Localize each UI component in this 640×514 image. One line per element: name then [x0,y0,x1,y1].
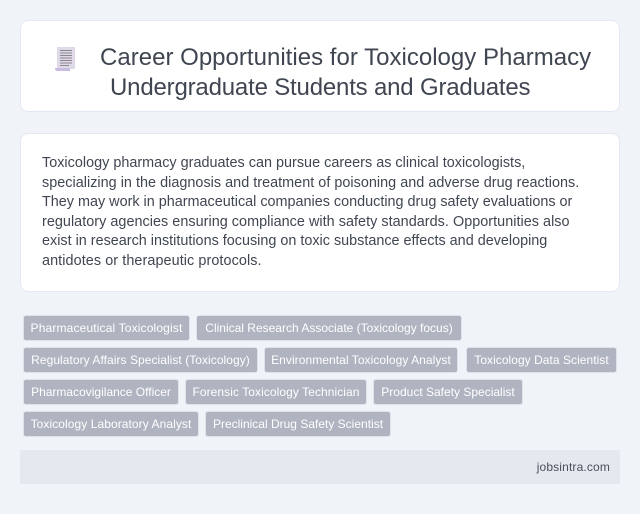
text block: description: exist in research institutions focusing on toxic substance effects and developing [42,233,547,249]
tag [373,379,523,405]
text block: description [42,155,579,269]
tag [23,379,179,405]
tag: Toxicology Laboratory Analyst [31,417,191,431]
tag: Preclinical Drug Safety Scientist [213,417,383,431]
tag [23,411,199,437]
text block: description: regulatory agencies ensuring compliance with safety standards. Opportunities also [42,214,570,230]
tag: Environmental Toxicology Analyst [271,353,451,367]
tag: Pharmacovigilance Officer [31,385,171,399]
tag [196,315,462,341]
text block: description: They may work in pharmaceutical companies conducting drug safety evaluations or [42,194,572,210]
panel: description card [20,133,620,292]
tag: Regulatory Affairs Specialist (Toxicology) [31,353,250,367]
tag: Toxicology Data Scientist [474,353,609,367]
icon: document scroll [55,47,75,71]
footer text: jobsintra.com [537,460,610,474]
text block: description: specializing in the diagnosis and treatment of poisoning and adverse drug reactions. [42,175,579,191]
tag: Forensic Toxicology Technician [192,385,360,399]
title [100,44,591,101]
tag [23,315,190,341]
footer bar [20,450,620,484]
title: Career Opportunities for Toxicology Pharmacy [100,44,591,71]
text block: description: antidotes or therapeutic protocols. [42,253,262,269]
tag: Clinical Research Associate (Toxicology focus) [205,321,453,335]
panel: header card [20,20,620,112]
tag list: job titles [23,315,617,437]
tag [466,347,617,373]
tag [185,379,367,405]
tag [23,347,258,373]
title: Undergraduate Students and Graduates [110,74,530,101]
tag: Product Safety Specialist [381,385,515,399]
tag [264,347,458,373]
text block: description: Toxicology pharmacy graduates can pursue careers as clinical toxicologists, [42,155,525,171]
tag [205,411,391,437]
tag: Pharmaceutical Toxicologist [31,321,182,335]
